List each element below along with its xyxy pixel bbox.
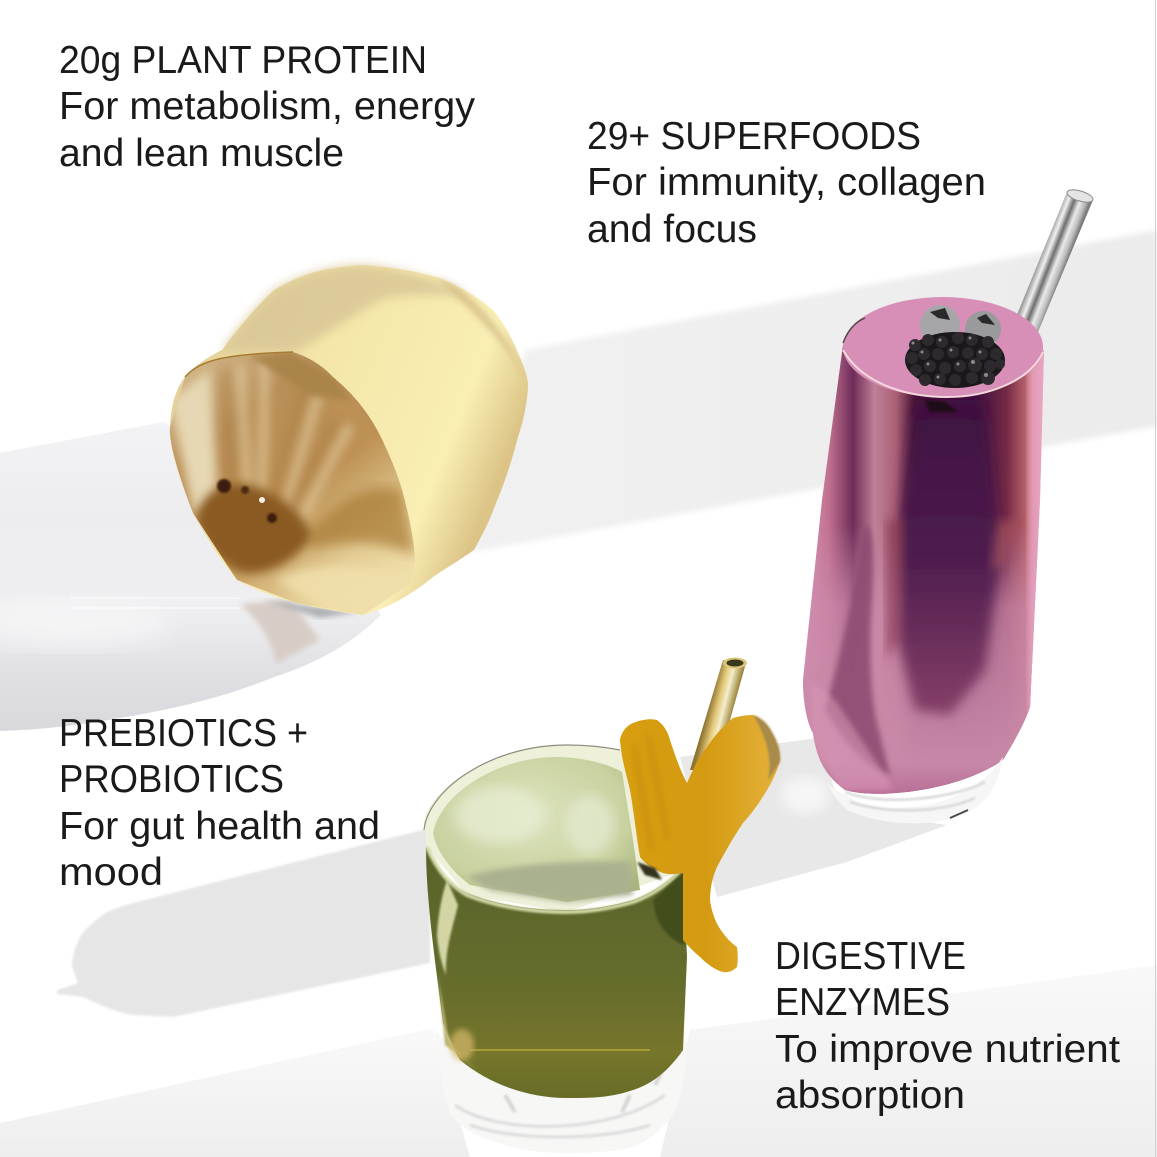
glare [470,1049,650,1051]
coconut cut face [170,352,415,615]
text: plant protein: For metabolism, energy [59,85,476,128]
glass rim and foam [424,745,685,912]
front rim highlight [427,847,683,912]
text: superfoods: and focus [587,208,757,251]
icon: metal straw [1012,187,1094,332]
dark seeds under rim [925,400,958,412]
text: digestive enzymes: ENZYMES [775,981,950,1024]
text: prebiotics and probiotics: PROBIOTICS [59,758,284,801]
text: digestive enzymes: DIGESTIVE [775,935,966,978]
coconut husk [170,265,528,615]
liquid surface shade [467,862,633,902]
foam patches [455,787,545,843]
text: digestive enzymes: absorption [775,1074,965,1117]
glass base [435,1030,687,1153]
ginger streaks [634,735,668,850]
coconut right rim shading [437,277,528,387]
coconut cut rim line [185,352,293,377]
text: digestive enzymes [775,935,1120,1117]
burn mark [637,862,662,880]
text: prebiotics and probiotics: mood [59,851,163,894]
icon: green drink glass [424,658,780,1153]
icon: purple smoothie glass [800,187,1094,823]
upper right light band [474,230,1157,552]
text: plant protein [59,39,476,175]
text: prebiotics and probiotics: For gut health and [59,805,380,848]
text: plant protein: and lean muscle [59,132,344,175]
green glass shadow [57,828,430,1017]
text: superfoods: For immunity, collagen [587,161,986,204]
text: superfoods [587,115,986,251]
icon: ginger slice [620,715,780,972]
smoothie glass body [800,340,1050,800]
left highlight [437,880,458,975]
smoothie foam surface [843,297,1043,397]
coconut top shading [222,265,470,352]
text: prebiotics and probiotics: PREBIOTICS + [59,712,308,755]
ginger skin [753,715,780,780]
shadow under ginger [653,872,684,945]
icon: blueberries and blackberry [905,305,1005,388]
text: plant protein: 20g PLANT PROTEIN [59,39,427,82]
icon: gold straw [690,658,747,770]
glass base [827,757,1003,823]
icon: coconut [170,265,528,615]
right page edge [1155,0,1156,1157]
text: digestive enzymes: To improve nutrient [775,1028,1120,1071]
green liquid [426,847,687,1098]
coconut shadow [0,422,381,731]
lower left light band [0,1028,470,1157]
text: prebiotics and probiotics [59,712,380,894]
purple glass shadow [680,738,947,897]
lower right light band [660,965,1157,1157]
text: superfoods: 29+ SUPERFOODS [587,115,921,158]
